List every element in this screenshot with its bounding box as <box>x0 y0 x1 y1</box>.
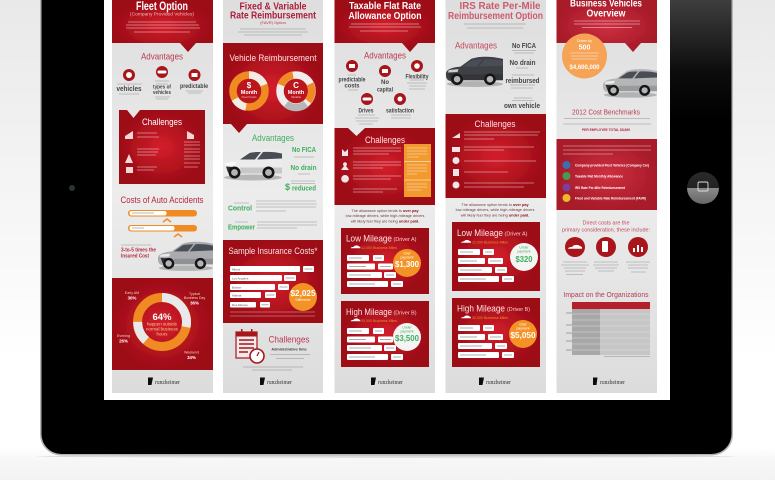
panel: high mileage driver B: High Mileage <box>346 307 392 318</box>
panel: high mileage driver B: (Driver B) <box>507 307 530 313</box>
logo: runzheimer <box>267 379 293 386</box>
panel: challenges <box>446 114 546 198</box>
cost benchmarks <box>563 108 651 132</box>
chart: fixed ring <box>233 75 265 107</box>
logo <box>148 378 181 386</box>
callout: over payment: $1,300 <box>395 260 420 269</box>
panel: accident timing donut: 34% <box>187 355 196 360</box>
panel: high mileage driver B: 30,000 Business Miles <box>361 319 397 323</box>
title: FAVR <box>230 2 317 35</box>
panel: challenges <box>334 128 435 205</box>
panel: sample insurance costs: Boston <box>232 286 242 290</box>
callout: over payment: Over <box>519 322 528 326</box>
logo <box>479 378 512 386</box>
list item 2: Taxable Flat Monthly Allowance <box>575 174 623 178</box>
logo <box>593 378 626 386</box>
panel: sample insurance costs <box>223 240 323 323</box>
advantage: control <box>228 201 317 212</box>
callout: orange stat circle <box>562 34 607 78</box>
advantage text: vehicles <box>116 84 142 93</box>
callout: over payment: payment <box>516 326 530 330</box>
callout: under payment: payment <box>400 330 414 334</box>
advantage list: reimbursed <box>506 78 540 85</box>
panel: sample insurance costs: Los Angeles <box>232 276 249 280</box>
callout: insured cost multiple <box>121 245 156 260</box>
heading: direct costs: Direct costs are the <box>582 220 630 226</box>
panel: challenges <box>119 110 205 184</box>
panel: low mileage driver A: Low Mileage <box>457 228 503 239</box>
callout: over payment <box>393 249 421 277</box>
header: overview <box>556 0 657 52</box>
panel: low mileage driver A: Low Mileage <box>346 234 392 244</box>
cost benchmarks: PER EMPLOYEE TOTAL $8,669 <box>582 128 630 132</box>
heading: advantages: Advantages <box>141 52 183 62</box>
heading: advantages: Advantages <box>364 50 406 60</box>
callout: under payment: Under <box>519 246 529 250</box>
panel: accident timing donut: happen outside <box>147 322 178 326</box>
advantage text: No <box>381 80 389 86</box>
advantage text: vehicles <box>153 90 171 96</box>
panel: accident timing donut: Typical <box>189 292 200 296</box>
advantage text: Flexibility <box>406 74 429 80</box>
advantage text: predictable <box>180 84 209 90</box>
panel: high mileage driver B: High Mileage <box>457 304 505 314</box>
panel: accident timing donut: Evening <box>117 334 130 338</box>
title: IRS: IRS Rate Per-Mile <box>460 1 541 12</box>
advantage text: Drives <box>358 108 374 114</box>
advantage list: reduced <box>292 186 316 192</box>
car: silver sedan <box>603 69 657 98</box>
chart: variable ring <box>280 75 312 108</box>
panel: accident timing donut: normal business <box>146 326 179 332</box>
panel: sample insurance costs: Sample Insurance Costs* <box>228 246 318 257</box>
text: allowance note: will likely feel they are being under paid. <box>351 220 419 224</box>
panel: IRS rate per-mile option <box>446 0 546 393</box>
heading: advantages: Advantages <box>455 40 497 50</box>
advantage list <box>504 43 540 110</box>
advantage list: $ <box>285 182 290 192</box>
text: allowance note <box>346 209 424 224</box>
header: taxable: Taxable Flat Rate <box>349 1 421 12</box>
title: IRS <box>448 1 543 28</box>
challenges text: Challenges <box>268 334 310 344</box>
title: FAVR: Fixed & Variable <box>240 2 307 12</box>
callout: orange stat circle: $4,600,000 <box>570 64 600 71</box>
callout: over payment <box>509 320 537 348</box>
advantage text <box>338 74 429 124</box>
chart: variable ring: Month <box>288 90 305 96</box>
car: white sedan <box>223 149 282 180</box>
header: fleet option: (Company Provided Vehicles) <box>130 12 194 16</box>
title: FAVR: (FAVR) Option <box>260 20 286 25</box>
callout: orange sidebar <box>404 144 431 197</box>
list item 3: IRS Rate Per-Mile Reimbursement <box>575 186 626 190</box>
advantage: empower <box>228 222 317 232</box>
panel: low mileage driver A <box>452 222 540 291</box>
panel: vehicle reimbursement: Vehicle Reimbursement <box>230 53 317 64</box>
panel: accident timing donut: 64% <box>152 312 172 323</box>
advantage list: No FICA <box>292 147 316 154</box>
panel: business vehicles overview <box>556 0 657 393</box>
advantage icons <box>123 66 200 81</box>
heading: impact: Impact on the Organizations <box>564 290 649 299</box>
text: allowance note <box>456 203 534 218</box>
advantage text: predictable <box>338 78 366 84</box>
panel: reimbursement options list <box>556 139 657 210</box>
panel: sample insurance costs: Des Moines <box>232 303 248 307</box>
cost benchmarks: 2012 Cost Benchmarks <box>572 108 640 116</box>
chart: fixed ring: $ <box>247 81 252 90</box>
callout: over payment: $5,050 <box>510 331 536 340</box>
panel: challenges: Challenges <box>365 135 405 145</box>
advantage list <box>285 147 316 192</box>
advantage list: No FICA <box>512 43 536 50</box>
advantage text: types of <box>153 84 171 90</box>
chart: fixed ring: Fixed Costs <box>242 95 257 99</box>
panel: high mileage driver B <box>452 298 540 367</box>
callout: under payment: Under <box>402 326 412 330</box>
challenges text: Administrative time <box>271 348 307 352</box>
heading: direct costs <box>562 220 650 234</box>
panel: accident timing donut: 26% <box>119 338 128 344</box>
panel: low mileage driver A <box>341 228 429 294</box>
challenges text <box>243 334 310 370</box>
panel: challenges: Challenges <box>474 119 516 129</box>
text: allowance note: will likely feel they are being under paid. <box>461 214 529 218</box>
list item 1: Company-provided Fleet Vehicles (Company Car) <box>575 164 649 168</box>
panel: accident timing donut: 36% <box>190 300 199 306</box>
callout: orange stat circle: Driven by <box>577 39 592 43</box>
icon: calendar and stopwatch <box>236 329 264 363</box>
logo: runzheimer <box>378 379 404 386</box>
panel: accident timing donut: Early AM <box>125 291 139 295</box>
callout: over payment: Over <box>403 252 412 256</box>
text: allowance note: low-mileage drivers, while high-mileage drivers <box>456 208 534 212</box>
header: fleet option <box>112 0 213 52</box>
callout: difference: Difference <box>296 298 311 302</box>
panel: accident timing donut: hours <box>157 332 168 336</box>
callout: under payment: $320 <box>516 254 533 264</box>
advantage icons <box>346 60 423 105</box>
logo: runzheimer <box>486 379 512 386</box>
cost bars <box>128 210 197 237</box>
panel: accident timing donut: Weekend <box>184 350 199 354</box>
icon: home button <box>687 172 719 204</box>
direct cost icons <box>561 237 650 274</box>
table: impact on the organizations <box>566 302 650 356</box>
callout: difference <box>289 283 317 311</box>
callout: under payment: payment <box>517 250 531 254</box>
panel: challenges: Challenges <box>142 117 182 127</box>
panel: high mileage driver B <box>341 301 429 367</box>
text: allowance note: The allowance option tends to over pay <box>461 203 529 207</box>
advantage text: costs <box>344 84 360 90</box>
heading: advantages: Advantages <box>252 133 294 143</box>
callout: difference: $2,025 <box>290 289 316 298</box>
panel: sample insurance costs: Miami <box>232 268 240 272</box>
panel: accident timing donut <box>112 278 213 370</box>
logo: runzheimer <box>155 379 181 386</box>
advantage list: No drain <box>510 60 536 67</box>
callout: over payment: payment <box>400 256 414 260</box>
infographic columns <box>112 0 657 393</box>
panel: accident timing donut: 30% <box>128 296 136 300</box>
callout: insured cost multiple: 3-to-5 times the <box>121 248 156 254</box>
panel: low mileage driver A: (Driver A) <box>394 237 417 243</box>
tablet screen <box>104 0 670 400</box>
advantage text: satisfaction <box>386 108 414 114</box>
logo <box>371 378 404 386</box>
panel: fleet option <box>112 0 213 393</box>
advantage: empower: Empower <box>228 224 255 232</box>
callout: under payment <box>393 323 421 351</box>
title: FAVR: Rate Reimbursement <box>230 10 317 22</box>
callout: under payment: $3,500 <box>395 334 420 343</box>
chart: variable ring: Variable <box>291 95 301 99</box>
panel: taxable flat rate allowance option <box>334 0 435 393</box>
panel: vehicle reimbursement <box>223 43 323 133</box>
header: overview: Overview <box>586 8 626 20</box>
chart: variable ring: C <box>293 81 299 90</box>
callout: under payment <box>510 243 538 271</box>
heading: direct costs: primary consideration, these include: <box>562 228 650 234</box>
panel: accident timing donut: Business Day <box>184 296 205 300</box>
advantage text: capital <box>377 88 393 94</box>
text: allowance note: low-mileage drivers, while high-mileage drivers <box>346 214 424 218</box>
car: black suv <box>446 57 503 87</box>
panel: high mileage driver B: 30,000 Business Miles <box>472 316 508 320</box>
chart: fixed ring: Month <box>241 90 258 96</box>
car: silver sedan <box>158 242 213 271</box>
callout: orange stat circle: 500 <box>579 44 590 52</box>
panel: low mileage driver A: 12,000 Business Miles <box>361 246 397 250</box>
panel: sample insurance costs: Atlanta <box>232 294 242 298</box>
icon: camera <box>69 185 75 191</box>
advantage list: No drain <box>290 165 316 172</box>
header: fleet option: Fleet Option <box>136 1 188 13</box>
logo: runzheimer <box>600 379 626 386</box>
header: taxable: Allowance Option <box>348 11 422 22</box>
panel: FAVR option <box>223 0 323 393</box>
header: taxable <box>334 0 435 52</box>
panel: low mileage driver A: 12,000 Business Miles <box>472 240 508 244</box>
panel: low mileage driver A: (Driver A) <box>504 232 528 238</box>
logo <box>260 378 293 386</box>
title: IRS: Reimbursement Option <box>448 11 543 22</box>
list item 4: Fixed and Variable Rate Reimbursement (FAVR) <box>575 196 646 200</box>
callout: insured cost multiple: Insured Cost <box>121 254 149 260</box>
advantage list: own vehicle <box>504 103 540 110</box>
heading: costs of auto accidents: Costs of Auto Accidents <box>120 195 204 206</box>
panel: high mileage driver B: (Driver B) <box>394 310 417 316</box>
advantage: control: Control <box>228 206 252 212</box>
text: allowance note: The allowance option tends to over pay <box>351 209 419 213</box>
advantage text <box>116 81 209 99</box>
